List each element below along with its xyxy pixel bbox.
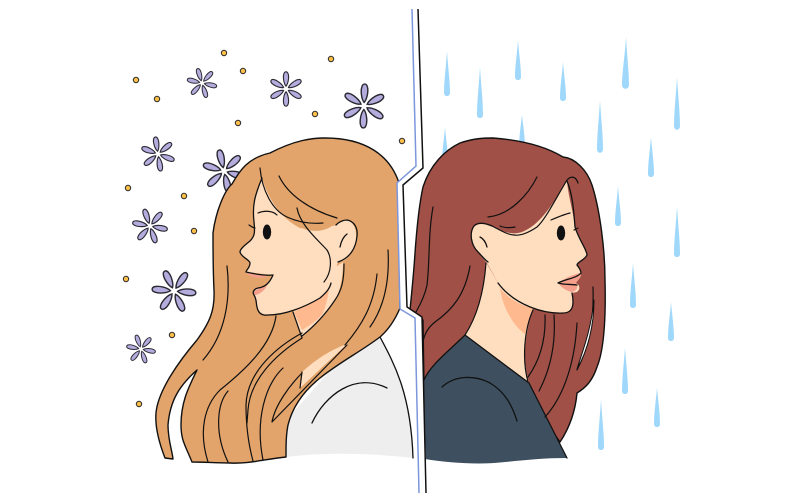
- left shirt: [286, 337, 413, 458]
- right hair gap: [577, 300, 594, 369]
- left ear: [336, 220, 357, 262]
- right lips: [558, 273, 581, 292]
- right eye: [557, 226, 565, 240]
- left woman: [156, 138, 413, 463]
- left fringe shade: [300, 220, 337, 231]
- left face lines: [240, 178, 331, 315]
- left neck: [293, 262, 343, 336]
- right face lines: [498, 181, 587, 313]
- left face: [240, 178, 356, 315]
- right shirt: [424, 335, 567, 463]
- right fringe shade: [500, 224, 528, 230]
- flowers: [123, 64, 385, 367]
- left chest skin: [300, 344, 347, 388]
- crack: white gap: [397, 0, 427, 500]
- yellow dots: [123, 50, 405, 407]
- right neck shadow: [500, 288, 533, 334]
- right woman: [410, 138, 605, 463]
- right hair strands: [416, 207, 593, 417]
- right neck: [465, 262, 533, 383]
- crack: black line: [403, 9, 426, 493]
- left hair: [156, 138, 400, 463]
- right face: [471, 181, 587, 313]
- crack: blue line: [397, 9, 419, 493]
- left neck shadow: [294, 288, 329, 330]
- rain drops: [442, 37, 680, 450]
- left hair strands: [203, 250, 388, 462]
- right ear: [471, 223, 492, 262]
- right neck hair edges: [465, 263, 533, 382]
- right hair: [410, 138, 605, 442]
- left lips: [246, 272, 268, 295]
- left eye: [263, 224, 271, 240]
